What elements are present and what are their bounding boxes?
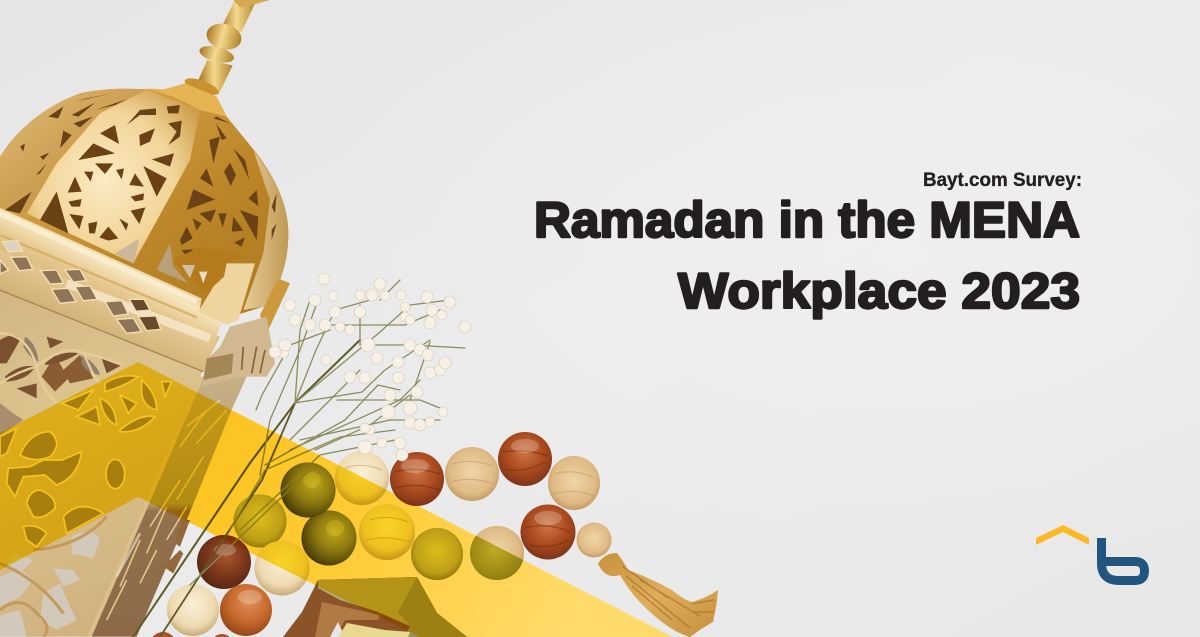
subtitle: Bayt.com Survey: bbox=[923, 170, 1082, 191]
small bead and tassel bbox=[576, 522, 718, 637]
lantern tab bbox=[198, 263, 255, 325]
yellow zone ornaments bbox=[0, 376, 172, 547]
title: Ramadan in the MENA bbox=[534, 192, 1080, 248]
baby's breath stems bbox=[133, 280, 465, 637]
dome cut-outs bbox=[5, 93, 277, 258]
lantern dome bbox=[0, 83, 288, 320]
lantern finial bbox=[183, 0, 270, 98]
decorative star bbox=[283, 577, 467, 637]
logo bbox=[1036, 525, 1144, 580]
logo chevron bbox=[1036, 525, 1089, 545]
yellow diagonal shape bbox=[0, 362, 673, 637]
baby's breath flowers bbox=[269, 273, 471, 461]
lantern body right face bbox=[87, 377, 247, 637]
lantern top plate with diamonds bbox=[0, 208, 255, 372]
dome centre panel bbox=[27, 90, 200, 263]
title bbox=[534, 192, 1080, 319]
yellow tinted objects bbox=[0, 362, 523, 637]
plate lower face bbox=[0, 247, 220, 372]
lantern body left face bbox=[0, 280, 220, 637]
dome far right panel bbox=[243, 150, 288, 310]
beads string bbox=[150, 432, 600, 637]
lantern bbox=[0, 0, 290, 637]
title: Workplace 2023 bbox=[678, 263, 1080, 319]
lower ornaments openings bbox=[0, 532, 100, 637]
logo letter b bbox=[1102, 538, 1144, 580]
photo objects bbox=[0, 0, 718, 637]
upper lattice openings bbox=[0, 335, 122, 435]
dome interior glimpse bbox=[115, 238, 139, 263]
plate top ridge bbox=[0, 208, 222, 343]
dome left panel bbox=[0, 89, 147, 213]
lantern right cuff bbox=[202, 278, 290, 387]
dome top cap bbox=[147, 83, 227, 117]
half bead tint bbox=[470, 536, 523, 580]
